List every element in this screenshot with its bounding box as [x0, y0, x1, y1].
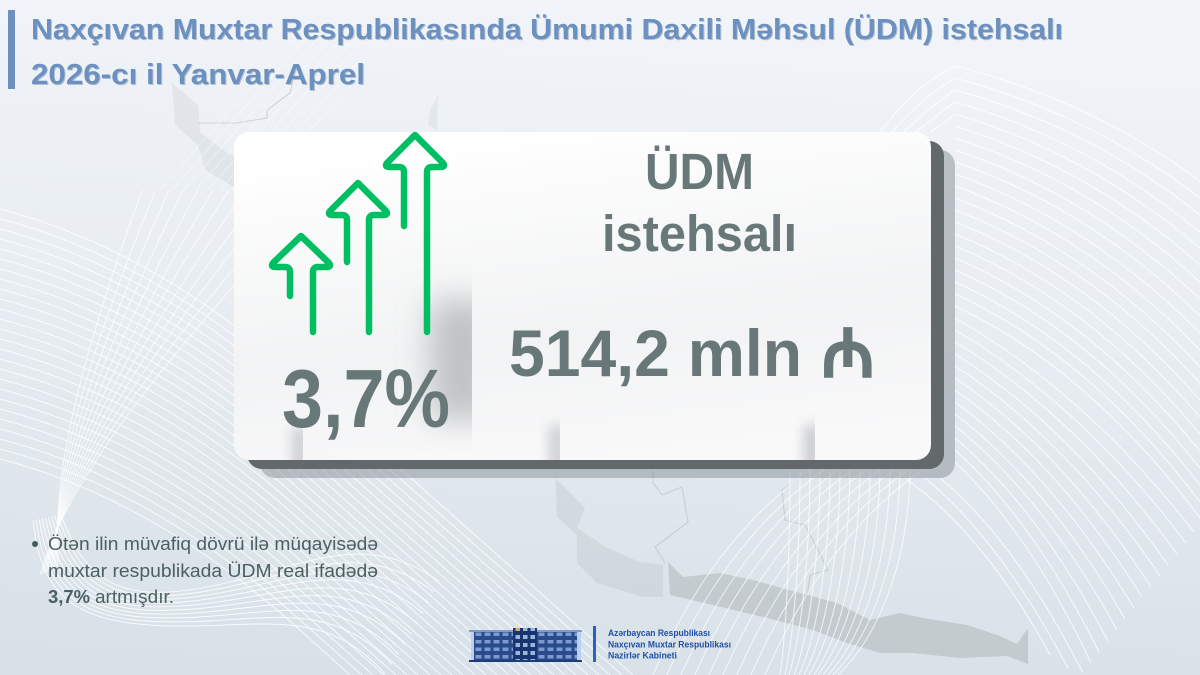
logo caption: Naxçıvan Muxtar Respublikası	[608, 640, 731, 650]
map silhouette	[172, 80, 1028, 664]
wave lines: lower centre ribbon	[653, 470, 922, 675]
icon: three green growth arrows	[272, 135, 444, 332]
GDP value: 514,2 mln	[509, 316, 802, 390]
title: Naxçıvan Muxtar Respublikasında Ümumi Daxili Məhsul (ÜDM) istehsalı	[31, 13, 1063, 46]
title accent bar	[8, 10, 15, 89]
logo caption	[608, 628, 731, 660]
bullet note	[32, 534, 378, 607]
title: 2026-cı il Yanvar-Aprel	[31, 59, 365, 91]
bullet note: artmışdır.	[95, 587, 174, 607]
wave lines: left ribbon	[0, 40, 633, 675]
logo caption: Nazirlər Kabineti	[608, 650, 677, 660]
wave lines: right ribbon	[880, 66, 1200, 673]
logo caption: Azərbaycan Respublikası	[608, 628, 710, 638]
heading: ÜDM istehsalı	[602, 143, 797, 262]
heading: ÜDM istehsalı: ÜDM	[645, 143, 754, 200]
bullet note: 3,7%	[48, 587, 90, 607]
GDP value: ₼	[822, 315, 874, 392]
bullet note: muxtar respublikada ÜDM real ifadədə	[48, 561, 378, 581]
arrow: large	[386, 135, 444, 332]
arrow: medium	[329, 183, 387, 332]
card back shadow	[260, 150, 955, 478]
logo: government building	[469, 628, 582, 662]
bullet note: Ötən ilin müvafiq dövrü ilə müqayisədə	[48, 534, 378, 554]
heading: ÜDM istehsalı: istehsalı	[602, 205, 797, 262]
percent value: 3,7%	[282, 352, 450, 445]
title	[31, 13, 1063, 91]
main card panel	[234, 132, 931, 473]
logo divider	[593, 626, 596, 662]
arrow: small	[272, 236, 330, 332]
card dark shadow	[247, 141, 944, 469]
